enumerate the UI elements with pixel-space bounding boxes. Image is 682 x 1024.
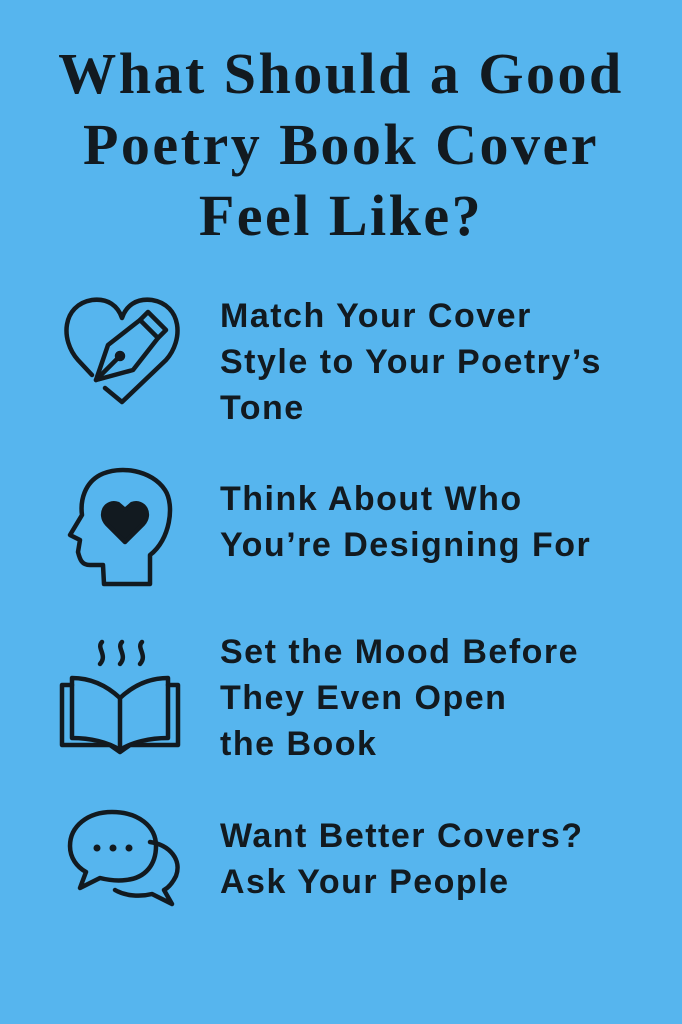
item 3 text — [220, 633, 579, 763]
item 1 text: Match Your Cover — [220, 297, 532, 335]
item 3 text: the Book — [220, 725, 377, 763]
item 4 text: Ask Your People — [220, 863, 510, 901]
item 3 text: Set the Mood Before — [220, 633, 579, 671]
item 2 text: Think About Who — [220, 480, 523, 518]
item 1 text: Tone — [220, 389, 305, 427]
item 4 text — [220, 817, 584, 901]
item 1 text — [220, 297, 602, 427]
item 1 text: Style to Your Poetry’s — [220, 343, 602, 381]
title: Feel Like? — [199, 183, 483, 248]
item 4 text: Want Better Covers? — [220, 817, 584, 855]
title: What Should a Good — [58, 41, 624, 106]
title: Poetry Book Cover — [83, 112, 599, 177]
title — [58, 41, 624, 248]
item 3 text: They Even Open — [220, 679, 507, 717]
item 2 text — [220, 480, 591, 564]
item 2 text: You’re Designing For — [220, 526, 591, 564]
